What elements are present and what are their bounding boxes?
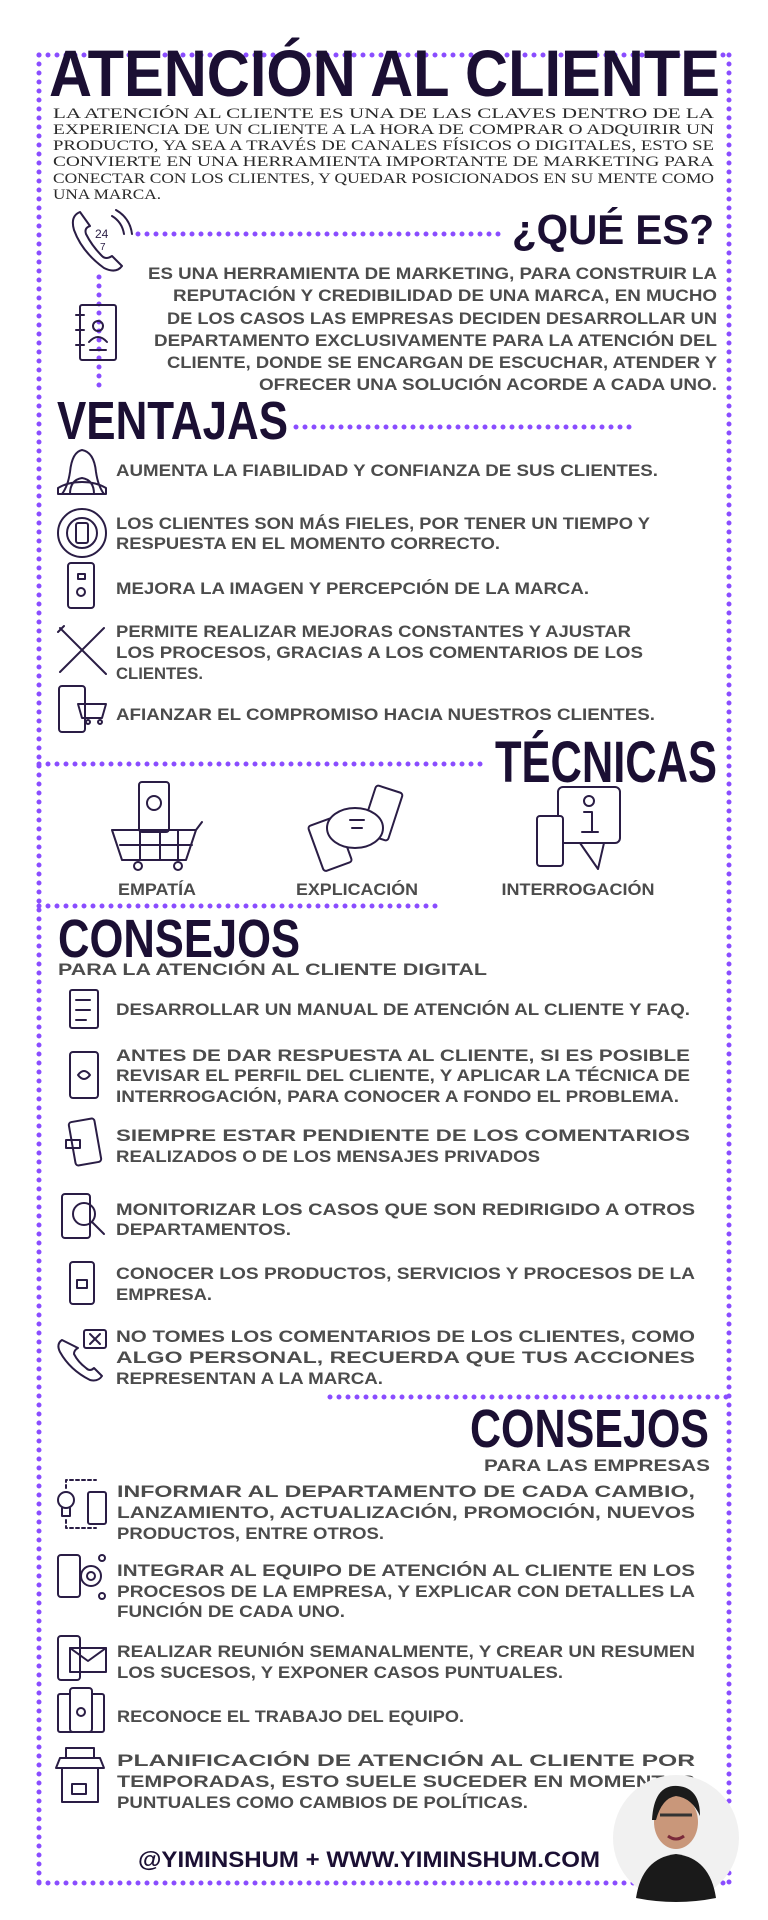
- heading: consejos empresas: PARA LAS EMPRESAS: [484, 1456, 710, 1475]
- icon: empatia cart: [112, 782, 202, 870]
- consejos digital list: CONOCER LOS PRODUCTOS, SERVICIOS Y PROCESOS DE LA: [116, 1264, 695, 1283]
- intro paragraph: LA ATENCIÓN AL CLIENTE ES UNA DE LAS CLAVES DENTRO DE LA: [53, 105, 714, 122]
- que es text: CLIENTE, DONDE SE ENCARGAN DE ESCUCHAR, ATENDER Y: [167, 353, 718, 372]
- consejos digital list: ALGO PERSONAL, RECUERDA QUE TUS ACCIONES: [116, 1348, 695, 1367]
- icon: phone 24/7: 24: [95, 227, 109, 241]
- consejos empresas list: [56, 1480, 695, 1812]
- heading: consejos empresas: [470, 1399, 710, 1475]
- ventajas list: AFIANZAR EL COMPROMISO HACIA NUESTROS CLIENTES.: [116, 705, 655, 724]
- consejos digital list: MONITORIZAR LOS CASOS QUE SON REDIRIGIDO A OTROS: [116, 1200, 695, 1219]
- que es text: DEPARTAMENTO EXCLUSIVAMENTE PARA LA ATENCIÓN DEL: [154, 331, 717, 350]
- heading: ventajas: VENTAJAS: [57, 391, 288, 451]
- que es text: ES UNA HERRAMIENTA DE MARKETING, PARA CONSTRUIR LA: [148, 264, 717, 283]
- consejos empresas list: TEMPORADAS, ESTO SUELE SUCEDER EN MOMENTOS: [117, 1772, 695, 1791]
- icon: tools: [58, 626, 106, 674]
- que es text: [148, 264, 718, 394]
- heading: que es: ¿QUÉ ES?: [512, 206, 714, 253]
- consejos digital list: EMPRESA.: [116, 1285, 212, 1304]
- consejos digital list: REALIZADOS O DE LOS MENSAJES PRIVADOS: [116, 1147, 540, 1166]
- heading: consejos digital: [58, 909, 487, 979]
- consejos digital list: REVISAR EL PERFIL DEL CLIENTE, Y APLICAR LA TÉCNICA DE: [116, 1066, 690, 1085]
- ventajas list: LOS CLIENTES SON MÁS FIELES, POR TENER UN TIEMPO Y: [116, 514, 651, 533]
- consejos empresas list: LANZAMIENTO, ACTUALIZACIÓN, PROMOCIÓN, NUEVOS: [117, 1503, 695, 1522]
- icon: phone cart: [59, 686, 106, 732]
- heading: consejos digital: PARA LA ATENCIÓN AL CLIENTE DIGITAL: [58, 960, 487, 979]
- icon: phone 24/7: [73, 210, 132, 271]
- consejos empresas list: REALIZAR REUNIÓN SEMANALMENTE, Y CREAR UN RESUMEN: [117, 1642, 695, 1661]
- tecnicas icons: INTERROGACIÓN: [502, 880, 654, 899]
- icon: lifebuoy phone: [58, 509, 106, 557]
- ventajas list: LOS PROCESOS, GRACIAS A LOS COMENTARIOS DE LOS: [116, 643, 643, 662]
- heading: consejos digital: CONSEJOS: [58, 909, 300, 969]
- consejos empresas list: PROCESOS DE LA EMPRESA, Y EXPLICAR CON DETALLES LA: [117, 1582, 695, 1601]
- consejos empresas list: PLANIFICACIÓN DE ATENCIÓN AL CLIENTE POR: [117, 1751, 695, 1770]
- consejos empresas list: FUNCIÓN DE CADA UNO.: [117, 1602, 345, 1621]
- consejos empresas list: PRODUCTOS, ENTRE OTROS.: [117, 1524, 384, 1543]
- intro paragraph: UNA MARCA.: [53, 187, 161, 203]
- consejos digital list: ANTES DE DAR RESPUESTA AL CLIENTE, SI ES POSIBLE: [116, 1046, 690, 1065]
- consejos digital list: DESARROLLAR UN MANUAL DE ATENCIÓN AL CLIENTE Y FAQ.: [116, 1000, 690, 1019]
- vertical dotted: [96, 277, 102, 394]
- que es text: REPUTACIÓN Y CREDIBILIDAD DE UNA MARCA, EN MUCHO: [173, 286, 717, 305]
- que es text: OFRECER UNA SOLUCIÓN ACORDE A CADA UNO.: [259, 375, 717, 394]
- icon: notebook: [76, 305, 116, 360]
- icon: woman: [58, 450, 106, 494]
- consejos empresas list: INFORMAR AL DEPARTAMENTO DE CADA CAMBIO,: [117, 1482, 695, 1501]
- que es text: DE LOS CASOS LAS EMPRESAS DECIDEN DESARROLLAR UN: [167, 309, 717, 328]
- consejos empresas list: PUNTUALES COMO CAMBIOS DE POLÍTICAS.: [117, 1793, 528, 1812]
- icon: phone 24/7: 7: [100, 242, 106, 253]
- intro paragraph: CONECTAR CON LOS CLIENTES, Y QUEDAR POSICIONADOS EN SU MENTE COMO: [53, 171, 714, 187]
- intro paragraph: EXPERIENCIA DE UN CLIENTE A LA HORA DE COMPRAR O ADQUIRIR UN: [53, 122, 714, 138]
- icon: phone camera: [68, 563, 94, 608]
- intro paragraph: PRODUCTO, YA SEA A TRAVÉS DE CANALES FÍSICOS O DIGITALES, ESTO SE: [53, 137, 714, 154]
- icon: interrogacion: [537, 787, 620, 869]
- consejos empresas list: LOS SUCESOS, Y EXPONER CASOS PUNTUALES.: [117, 1663, 563, 1682]
- consejos digital list: INTERROGACIÓN, PARA CONOCER A FONDO EL PROBLEMA.: [116, 1087, 679, 1106]
- consejos digital list: [58, 990, 695, 1388]
- intro paragraph: CONVIERTE EN UNA HERRAMIENTA IMPORTANTE DE MARKETING PARA: [53, 154, 714, 170]
- ventajas list: AUMENTA LA FIABILIDAD Y CONFIANZA DE SUS CLIENTES.: [116, 461, 658, 480]
- consejos empresas list: INTEGRAR AL EQUIPO DE ATENCIÓN AL CLIENTE EN LOS: [117, 1561, 695, 1580]
- consejos digital list: NO TOMES LOS COMENTARIOS DE LOS CLIENTES, COMO: [116, 1327, 695, 1346]
- ventajas list: MEJORA LA IMAGEN Y PERCEPCIÓN DE LA MARCA.: [116, 579, 589, 598]
- ventajas list: [58, 450, 658, 732]
- tecnicas icons: [112, 782, 654, 899]
- icon: explicacion: [308, 785, 403, 872]
- ventajas list: CLIENTES.: [116, 664, 203, 683]
- dotted line to que es: [138, 232, 507, 236]
- labels: EMPATÍA: [118, 880, 196, 899]
- consejos digital list: DEPARTAMENTOS.: [116, 1220, 291, 1239]
- ventajas list: RESPUESTA EN EL MOMENTO CORRECTO.: [116, 534, 500, 553]
- footer credit: @YIMINSHUM + WWW.YIMINSHUM.COM: [138, 1847, 600, 1872]
- consejos empresas list: RECONOCE EL TRABAJO DEL EQUIPO.: [117, 1707, 464, 1726]
- consejos digital list: SIEMPRE ESTAR PENDIENTE DE LOS COMENTARIOS: [116, 1126, 690, 1145]
- tecnicas icons: EXPLICACIÓN: [296, 880, 418, 899]
- intro paragraph: [53, 105, 714, 203]
- photo: author: [613, 1775, 739, 1902]
- ventajas list: PERMITE REALIZAR MEJORAS CONSTANTES Y AJUSTAR: [116, 622, 631, 641]
- consejos digital list: REPRESENTAN A LA MARCA.: [116, 1369, 383, 1388]
- heading: consejos empresas: CONSEJOS: [470, 1399, 709, 1459]
